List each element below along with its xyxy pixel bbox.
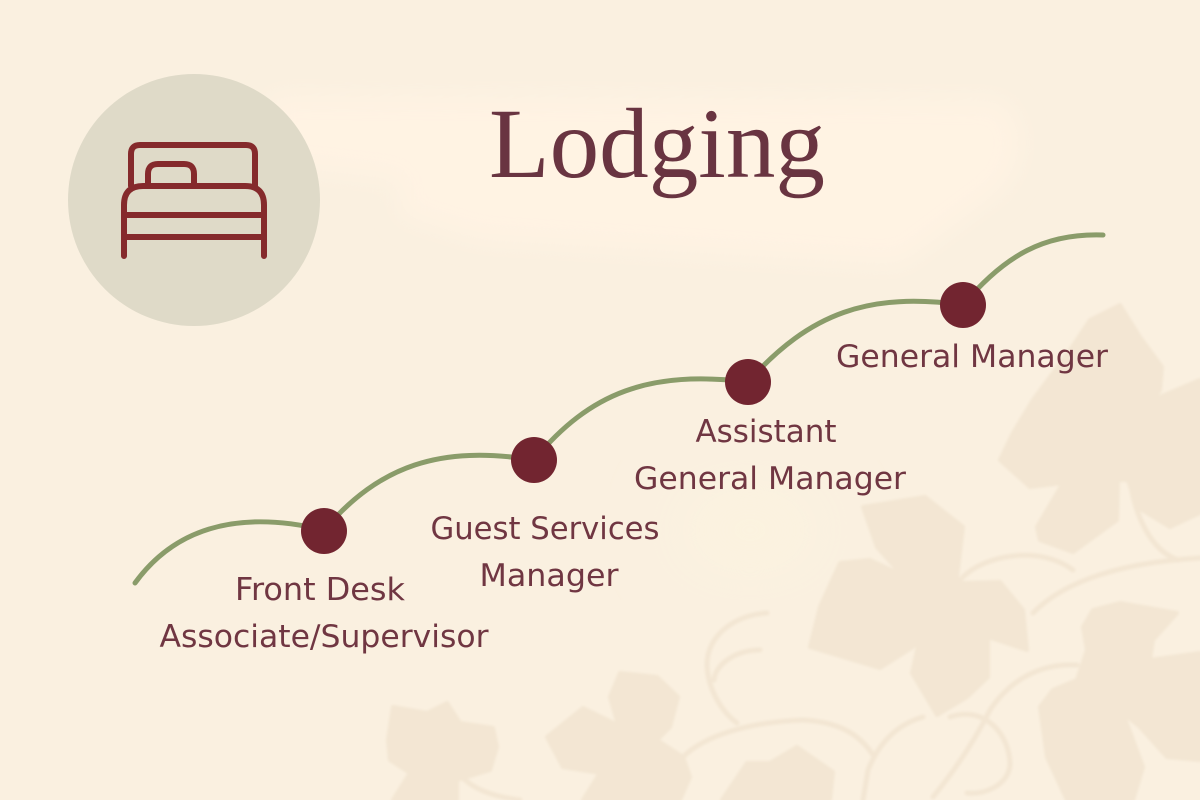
- label: Front Desk Associate/Supervisor: Front Desk: [235, 572, 405, 608]
- leaf: centre: [810, 497, 1027, 715]
- icon circle background: [68, 74, 320, 326]
- label: Assistant General Manager: Assistant: [696, 414, 836, 450]
- decorative vine leaves: [388, 305, 1200, 800]
- label: General Manager: General Manager: [836, 339, 1108, 375]
- bed outline: [124, 145, 264, 256]
- vine stems: [463, 480, 1200, 800]
- career path line: [135, 235, 1103, 583]
- label: Assistant General Manager: [634, 414, 906, 497]
- leaf: lower right: [1040, 603, 1200, 800]
- label: Front Desk Associate/Supervisor: [160, 572, 489, 655]
- milestone dots: [301, 282, 986, 554]
- leaf: bottom middle: [547, 673, 690, 800]
- icon: bed: [68, 74, 320, 326]
- label: Assistant General Manager: General Manager: [634, 461, 906, 497]
- label: Guest Services Manager: [430, 511, 660, 594]
- label: Guest Services Manager: Guest Services: [430, 511, 660, 547]
- label: Front Desk Associate/Supervisor: Associate/Supervisor: [160, 619, 489, 655]
- title: Lodging: [489, 88, 825, 199]
- leaf: bottom left: [388, 703, 497, 800]
- leaf: upper right: [1000, 305, 1200, 552]
- label: Guest Services Manager: Manager: [480, 558, 619, 594]
- leaf: bottom small: [722, 747, 833, 800]
